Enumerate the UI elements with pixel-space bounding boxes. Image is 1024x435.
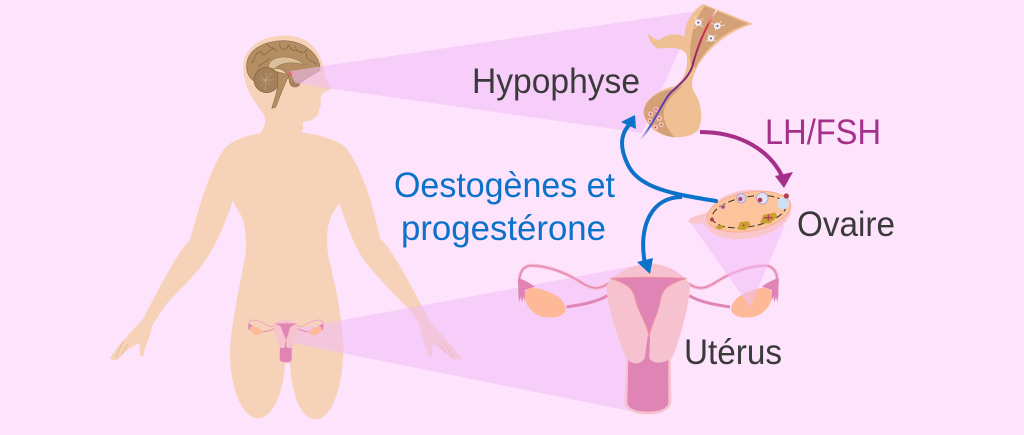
portal vessel — [640, 10, 717, 140]
follicle cycle arrows — [710, 190, 788, 233]
purple arrow: LH/FSH to ovary — [700, 132, 793, 188]
label: Hypophyse: Hypophyse — [472, 62, 640, 101]
light beam: ovary to uterine adnexa — [690, 222, 785, 307]
large uterus — [518, 263, 779, 414]
neurons — [694, 17, 725, 42]
label: Ovaire: Ovaire — [797, 205, 895, 244]
label: Utérus: Utérus — [684, 333, 782, 372]
cervix canal and vagina — [627, 337, 668, 412]
secretory cells — [647, 107, 664, 130]
human body silhouette — [110, 107, 462, 419]
light beam: body to uterus — [290, 264, 645, 413]
brain — [247, 41, 320, 108]
label: Oestogènes et: Oestogènes et — [394, 166, 615, 205]
pituitary gland — [640, 4, 753, 140]
ovary detail — [688, 185, 794, 239]
uterine cavity — [610, 277, 687, 337]
right tube and ovary — [688, 266, 779, 318]
light beam: brain to pituitary — [290, 11, 697, 133]
label: LH/FSH: LH/FSH — [765, 113, 881, 152]
left tube and ovary — [518, 266, 608, 318]
head — [243, 36, 332, 130]
blue arrow: hormones to pituitary — [621, 115, 716, 201]
label: progestérone: progestérone — [401, 209, 606, 248]
uterine wall — [607, 263, 690, 414]
follicles — [710, 193, 789, 230]
blue arrow: hormones to uterus — [637, 197, 682, 274]
small uterus on body — [248, 319, 323, 363]
